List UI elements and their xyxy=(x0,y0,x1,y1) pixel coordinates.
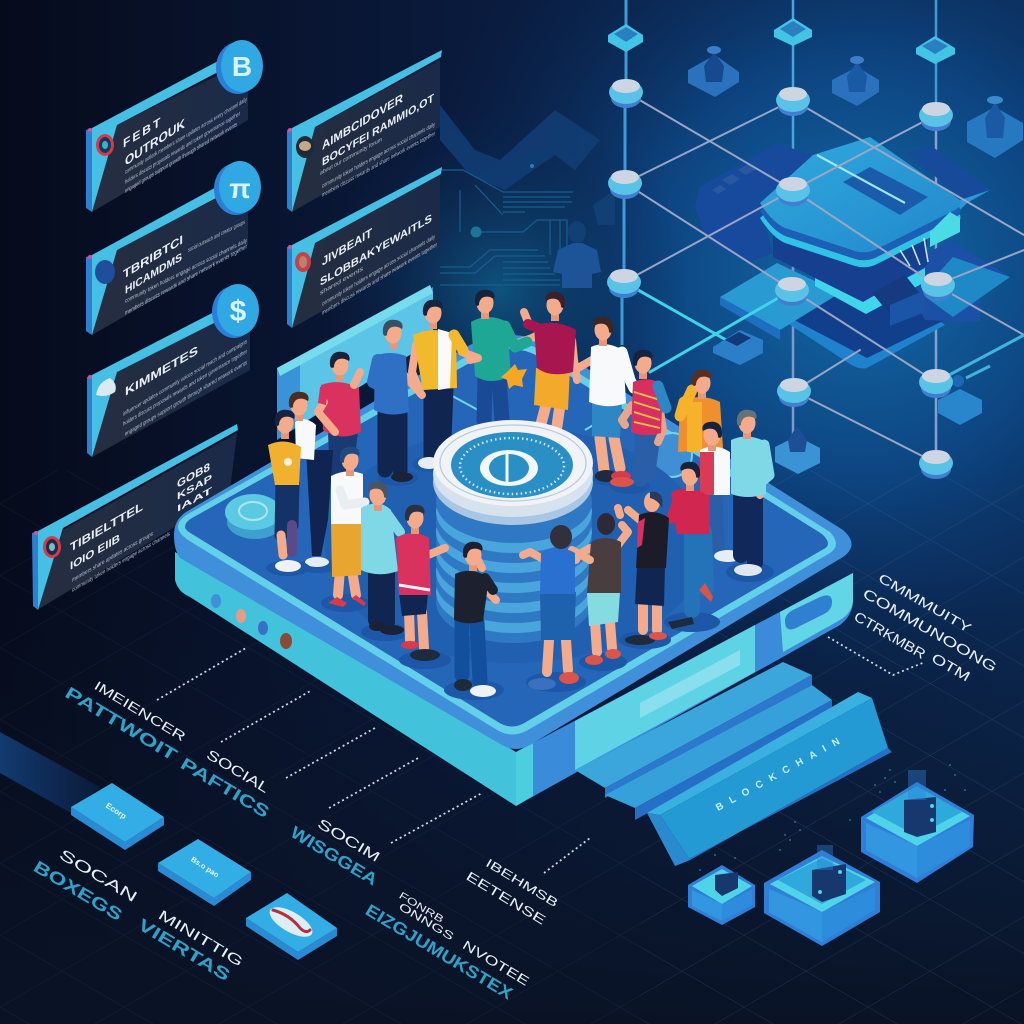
panel: info card 2: members discuss rewards and share network events together xyxy=(125,243,248,317)
left bottom labels: VIERTAS xyxy=(135,915,233,985)
left bottom labels: WISGGEA xyxy=(287,823,381,889)
icon: coin badge xyxy=(214,161,261,215)
platform: highlight slot xyxy=(640,650,740,718)
isometric block A xyxy=(861,770,974,883)
panel: info card 6: community token holders engage across social channels daily xyxy=(322,233,435,308)
panel: info card 4: GOB8 xyxy=(177,459,210,491)
icon: coin badge: π xyxy=(229,173,251,204)
network links xyxy=(622,0,936,463)
floor shadow ring xyxy=(325,427,705,663)
panel: info card 2: TBRIBTCI xyxy=(123,232,183,282)
person: light cyan shirt xyxy=(726,410,774,582)
platform: top rim xyxy=(174,335,852,749)
panel: info card 2: community token holders engage across social channels daily xyxy=(125,237,248,305)
left bottom labels: ONNGS xyxy=(396,901,456,943)
right labels: COMMUNOONG xyxy=(860,585,1000,675)
person: brown shirt back view xyxy=(576,513,628,671)
icon: red badge xyxy=(295,252,311,272)
person: orange shirt xyxy=(678,370,723,452)
person: maroon shirt xyxy=(524,292,577,426)
platform: oval slot xyxy=(785,595,832,629)
left bottom labels: EIZGJUMUKSTEX xyxy=(362,901,517,1004)
panel: info card 3: holders discuss proposals rewards and token governance together xyxy=(123,348,248,428)
left bottom labels: EETENSE xyxy=(464,868,549,928)
person: red and white shirt xyxy=(700,422,742,562)
ramp with blockchain label xyxy=(647,692,892,866)
panel: info card 3: KIMMETES xyxy=(125,342,198,399)
data particles xyxy=(699,764,966,871)
right labels: CTRKMBR xyxy=(851,608,929,662)
platform base xyxy=(174,285,853,806)
person: white shirt dark trousers xyxy=(289,392,338,573)
right labels: CMMMUITY xyxy=(876,570,975,636)
panel: info card 3 xyxy=(87,284,259,457)
person: red shirt front xyxy=(396,505,451,669)
small coin on floor xyxy=(225,494,283,539)
person: striped shirt xyxy=(610,350,666,494)
button 2 xyxy=(158,839,251,906)
floor disc right xyxy=(652,433,692,477)
bar leading to buttons xyxy=(0,732,100,813)
dotted leader lines xyxy=(157,637,925,873)
panel: info card 1 xyxy=(86,40,263,212)
panel: info card 5: community token holders engage across social channels daily xyxy=(322,121,436,190)
person: cyan shirt xyxy=(361,482,409,641)
panel: info card 1: OUTROUK xyxy=(125,116,186,170)
floor accent lines xyxy=(445,392,690,455)
right side back people xyxy=(700,410,774,582)
icon: coin badge: $ xyxy=(230,295,247,328)
platform: side indicator dots xyxy=(211,594,292,649)
button 1 xyxy=(71,783,164,850)
panel: info card 2 xyxy=(86,161,261,335)
panel: info card 5: AIMBCIDOVER xyxy=(322,90,404,153)
left bottom labels: NVOTEE xyxy=(460,937,532,989)
left bottom labels: PAFTICS xyxy=(177,754,273,822)
panel: info card 1: engaged groups support growth through shared network events xyxy=(125,121,237,195)
person: black shirt back view xyxy=(444,542,504,700)
panel: info card 4: community token holders engage across channels xyxy=(72,531,170,594)
person: white shirt and blue shorts xyxy=(578,317,634,486)
platform: back wall xyxy=(277,285,433,440)
person: crimson long sleeve xyxy=(664,462,720,632)
left bottom labels: SOCIM xyxy=(315,815,383,865)
icon: coin tile xyxy=(296,136,314,158)
person: yellow shirt far left xyxy=(266,410,310,576)
panel: info card 1: FEBT xyxy=(123,113,162,151)
panel: info card 4: IAAT xyxy=(177,485,212,515)
panel: info card 5: members discuss rewards and share network events together xyxy=(322,130,436,199)
panel: info card 5 xyxy=(287,50,442,212)
panel: info card 6: JIVBEAIT xyxy=(322,225,372,269)
faded isometric cubes xyxy=(688,46,1023,158)
left bottom labels: IBEHMSB xyxy=(483,856,561,910)
panel: info card 4: TIBIELTTEL xyxy=(70,499,143,555)
person: white shirt yellow shorts xyxy=(321,447,369,612)
step 2 xyxy=(605,685,832,820)
panel: info card 2: social outreach and creator groups xyxy=(188,219,245,254)
panel: info card 4: KSAP xyxy=(177,472,212,503)
icon: cloud xyxy=(96,378,116,396)
panel: info card 6: members discuss rewards and share network events together xyxy=(322,241,438,317)
panel: info card 3: engaged groups support growth through shared network events xyxy=(125,359,247,438)
left bottom labels: SOCIAL xyxy=(204,746,272,796)
ramp with blockchain label: BLOCKCHAIN xyxy=(714,736,842,814)
panel: info card 5: about our community forum xyxy=(320,136,382,177)
platform: right face xyxy=(516,573,853,806)
isometric block B xyxy=(764,845,880,946)
network nodes xyxy=(607,79,955,479)
person: yellow and white shirt xyxy=(412,300,478,472)
left bottom labels: PATTWOIT xyxy=(62,683,181,765)
people: back row xyxy=(318,290,723,494)
button 3 with swirl icon xyxy=(246,893,337,960)
icon: coin badge: B xyxy=(232,51,252,82)
top and lower network cubes xyxy=(608,18,990,474)
left bottom labels: FONRB xyxy=(397,890,446,926)
panel: info card 6 xyxy=(287,167,442,328)
right labels: OTM xyxy=(929,650,973,684)
panel: info card 6: shared events xyxy=(320,265,363,297)
right labels xyxy=(851,570,1000,684)
person: blue shirt back view xyxy=(523,525,590,692)
button 2: Bs.o pao xyxy=(189,855,221,880)
left bottom labels: BOXEGS xyxy=(30,857,126,925)
diagonal network connections xyxy=(624,92,1024,463)
person: blue shirt xyxy=(373,320,422,486)
platform: floor xyxy=(185,349,828,726)
icon: target badge xyxy=(43,536,61,558)
panel: info card 4 xyxy=(32,424,238,610)
panel: info card 3: influencer updates community voices social reach and campaigns xyxy=(123,338,247,418)
platform: left face xyxy=(175,530,516,806)
faint circuit backdrop xyxy=(440,105,615,285)
button 1: Ecorp xyxy=(104,801,128,821)
isometric block C xyxy=(688,865,755,925)
central chip server xyxy=(695,137,1010,368)
person: green shirt xyxy=(471,290,548,420)
left bottom labels xyxy=(30,678,561,1004)
left bottom labels: MINITTIG xyxy=(156,906,246,970)
step 1 xyxy=(575,662,812,798)
steps below platform xyxy=(575,662,892,866)
left bottom labels: IMEIENCER xyxy=(92,678,188,744)
faint background figure xyxy=(553,221,601,288)
person: red shirt xyxy=(318,352,361,480)
icon: coin badge xyxy=(216,40,263,94)
panel: info card 4: members share updates across groups xyxy=(72,530,153,584)
panel: info card 1: community outlook members share updates across every channel daily xyxy=(125,96,247,176)
panel: info card 5: BOCYFEI RAMMIO,OT xyxy=(322,90,435,169)
person: black shirt with red sleeve xyxy=(618,492,671,649)
panel: info card 1: holders discuss proposals rewards and token governance together xyxy=(125,110,240,186)
people: front row xyxy=(321,447,720,700)
coin stack xyxy=(433,420,593,643)
panel: info card 4: IOIO EIIB xyxy=(70,531,120,573)
icon: coin badge xyxy=(212,284,259,338)
left side people xyxy=(266,392,338,576)
icon: target badge xyxy=(96,134,114,156)
panel: info card 2: HICAMDMS xyxy=(125,250,182,297)
icon: blue cluster xyxy=(95,260,115,284)
panel: info card 6: SLOBBAKYEWAITLS xyxy=(320,211,432,289)
left bottom labels: SOCAN xyxy=(56,846,140,906)
